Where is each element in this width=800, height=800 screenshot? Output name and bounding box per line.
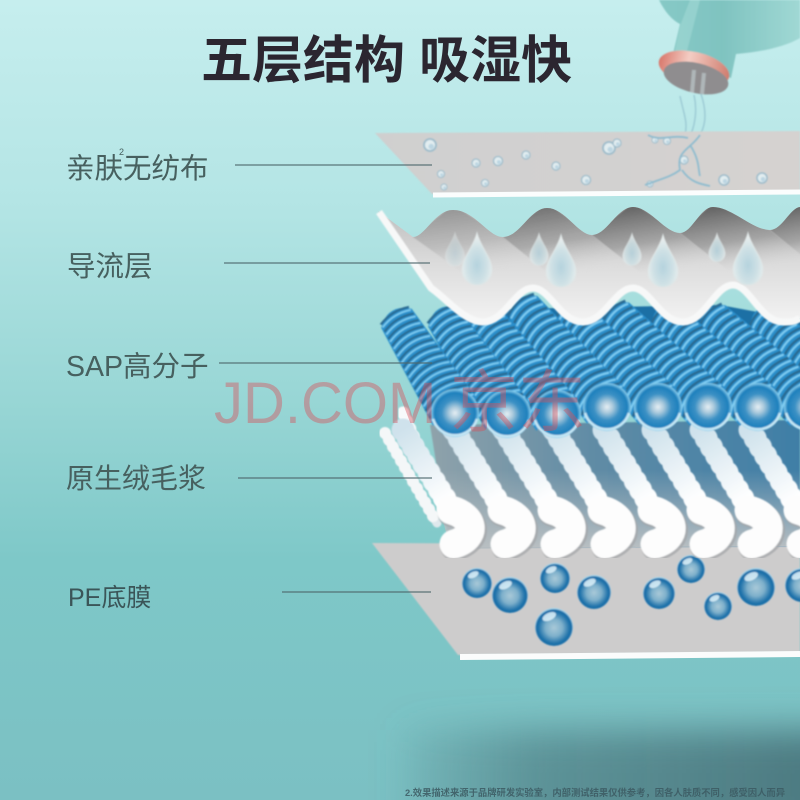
label: 原生绒毛浆: 原生绒毛浆 — [66, 463, 206, 494]
layer 5: PE back film with blue beads — [372, 543, 800, 657]
label: 导流层: 导流层 — [67, 251, 153, 283]
leader lines — [219, 165, 432, 592]
label: 亲肤无纺布: 亲肤无纺布 — [66, 153, 209, 185]
layer 2: wavy flow-guide sheet — [378, 203, 800, 322]
footnote: 2.效果描述来源于品牌研发实验室，内部测试结果仅供参考，因各人肤质不同，感受因人而异 — [405, 787, 785, 798]
dark bottom shading — [405, 730, 800, 800]
layer 1: skin-friendly nonwoven sheet — [375, 131, 800, 195]
label: SAP高分子: SAP高分子 — [66, 351, 209, 383]
title: 五层结构 吸湿快 — [201, 32, 572, 89]
watermark — [214, 365, 586, 441]
icon: water drops in flow sheet — [445, 232, 763, 287]
icon: bottle pouring water — [655, 0, 800, 172]
layer 3: SAP polymer coils — [370, 283, 800, 438]
label: PE底膜: PE底膜 — [68, 584, 151, 612]
watermark: 京东 — [450, 365, 586, 441]
label: superscript 2: 2 — [119, 147, 124, 157]
layer 4: fluff pulp fibre rods — [385, 413, 800, 548]
watermark: JD.COM — [214, 371, 436, 436]
